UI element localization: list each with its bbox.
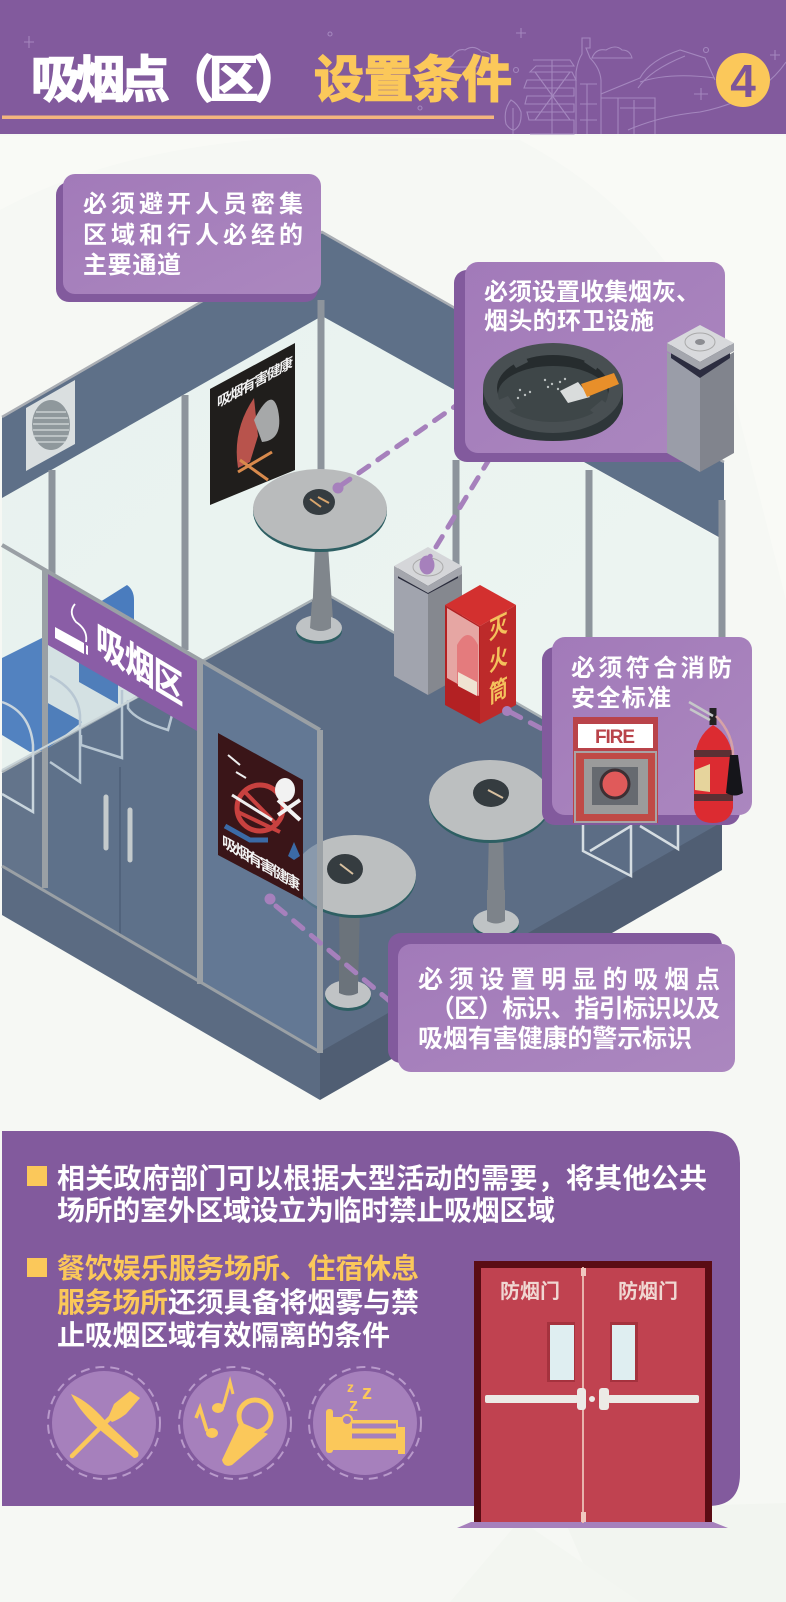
- cigarette icon: [55, 604, 88, 655]
- title: 设置条件: [314, 52, 512, 108]
- callout: avoid crowded areas: [56, 174, 321, 302]
- back glass walls: [2, 315, 722, 1000]
- callout: signage: （区）标识、指引标识以及: [430, 995, 720, 1023]
- back posts: [52, 300, 722, 748]
- icon: bed and zzz: z: [362, 1382, 372, 1404]
- cabinet label: [489, 608, 508, 709]
- table right: [429, 760, 551, 938]
- large trash bin: [667, 325, 734, 472]
- large ashtray: [483, 343, 623, 441]
- blue chairs: [2, 585, 172, 812]
- ashtray on table: [473, 779, 509, 807]
- icon: knife and fork: [48, 1367, 160, 1479]
- right chair legs: [583, 824, 678, 876]
- callout: signage: 吸烟有害健康的警示标识: [418, 1025, 692, 1053]
- ashtray on table: [303, 489, 335, 515]
- cabinet label: 筒: [489, 672, 508, 709]
- poster: no smoking: 吸烟有害健康: [222, 832, 300, 895]
- callout: avoid crowded areas: 必须避开人员密集: [83, 190, 303, 218]
- callout: fire safety: 必须符合消防: [571, 655, 732, 682]
- callout: avoid crowded areas: 主要通道: [83, 252, 181, 279]
- fire alarm: [573, 717, 658, 823]
- fire extinguisher cabinet: [445, 585, 516, 724]
- icon: bed and zzz: z: [349, 1395, 358, 1415]
- smoking area sign: [48, 573, 197, 731]
- door text: 防烟门: [618, 1280, 678, 1303]
- header banner: [0, 0, 786, 134]
- callout: ash collection: [454, 262, 734, 472]
- trash bin: [394, 547, 462, 695]
- door windows: [547, 1322, 638, 1382]
- floor: [2, 593, 724, 1053]
- front wall glass tint: [200, 660, 320, 1052]
- door handles: [106, 797, 130, 860]
- poster: no smoking: [218, 733, 303, 900]
- table front: [294, 835, 416, 1011]
- fire alarm: FIRE: [595, 727, 635, 748]
- badge number 4: 4: [730, 55, 756, 107]
- isometric smoking room: [2, 232, 724, 1100]
- fire door illustration: [457, 1261, 728, 1528]
- bullet two: 还须具备将烟雾与禁: [168, 1287, 419, 1318]
- callout: fire safety: [542, 637, 752, 825]
- title: [31, 52, 512, 108]
- bullet one: 场所的室外区域设立为临时禁止吸烟区域: [57, 1195, 555, 1226]
- callout: signage: 必须设置明显的吸烟点: [418, 966, 720, 994]
- city skyline line art: [24, 28, 786, 134]
- bullet two: 止吸烟区域有效隔离的条件: [57, 1320, 390, 1351]
- door text: [500, 1280, 678, 1303]
- callout: avoid crowded areas: 区域和行人必经的: [83, 222, 303, 249]
- cabinet label: 火: [489, 640, 508, 677]
- callout: ash collection: 烟头的环卫设施: [484, 308, 654, 335]
- dashed connector lines: [267, 396, 548, 1003]
- bottom information panel: [2, 1131, 740, 1506]
- callout: fire safety: 安全标准: [571, 685, 671, 712]
- bullet one: [27, 1163, 707, 1226]
- bullet one: 相关政府部门可以根据大型活动的需要，将其他公共: [57, 1163, 707, 1194]
- fire extinguisher: [689, 702, 743, 823]
- cabinet label: 灭: [489, 608, 508, 645]
- vent: [26, 380, 75, 471]
- icon: bed and zzz: z: [347, 1379, 354, 1395]
- icon: bed and zzz: [309, 1367, 421, 1479]
- poster: lungs: 吸烟有害健康: [217, 353, 293, 412]
- title underline: [2, 116, 494, 119]
- badge number 4: [716, 53, 770, 107]
- front wall frames: [2, 545, 320, 1053]
- title: 吸烟点（区）: [31, 52, 303, 108]
- table back: [253, 469, 387, 644]
- door text: 防烟门: [500, 1280, 560, 1303]
- wall bands: [2, 232, 322, 498]
- ashtray on table: [327, 854, 363, 884]
- bullet two: [27, 1253, 419, 1351]
- platform right side: [320, 822, 722, 1100]
- smoking area sign: 吸烟区: [96, 617, 183, 713]
- callout: signage: [388, 933, 735, 1072]
- callout: ash collection: 必须设置收集烟灰、: [484, 279, 700, 306]
- door seam: [119, 767, 121, 935]
- poster: lungs: [210, 343, 295, 505]
- bullet two: 服务场所: [57, 1287, 168, 1318]
- bullet two: 餐饮娱乐服务场所、住宿休息: [57, 1253, 419, 1284]
- panic bars: [485, 1388, 699, 1410]
- icon: microphone and notes: [179, 1367, 291, 1479]
- platform left side: [2, 866, 320, 1100]
